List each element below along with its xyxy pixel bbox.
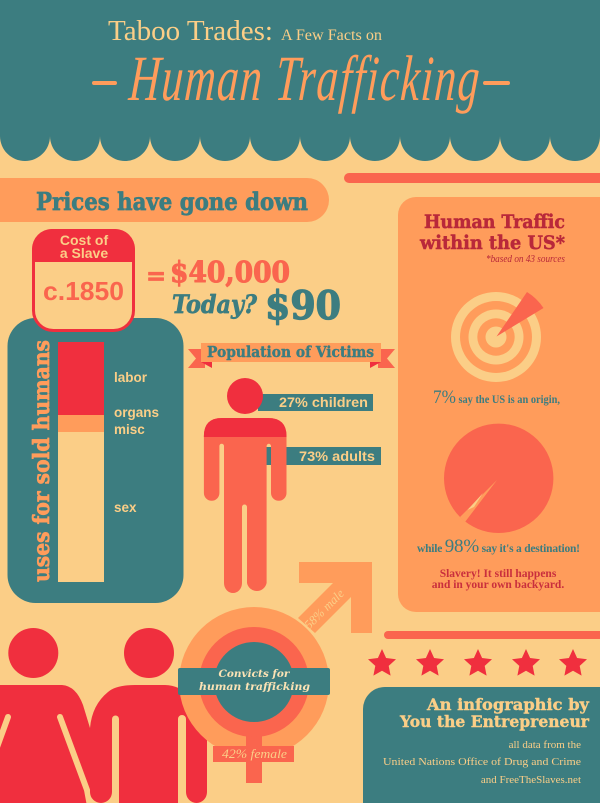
text: 7%: 7% say the US is an origin, bbox=[433, 387, 560, 408]
panel: credits: An infographic by bbox=[426, 695, 590, 714]
stars bbox=[368, 649, 587, 676]
bar labels bbox=[114, 370, 159, 515]
ribbon: population of victims: Population of Victims bbox=[207, 344, 374, 361]
lower rule bbox=[384, 631, 600, 639]
panel heading: Human Traffic bbox=[424, 211, 565, 233]
label: children: 27% children bbox=[279, 395, 368, 410]
panel heading: *based on 43 sources bbox=[486, 254, 565, 265]
icon: target 7% bbox=[451, 292, 544, 382]
title bbox=[92, 15, 510, 114]
price then: = bbox=[146, 261, 166, 290]
panel: credits: all data from the bbox=[509, 739, 581, 751]
price today: $90 bbox=[265, 283, 341, 329]
icon: male arrow bbox=[298, 562, 372, 633]
icon: female symbol bbox=[178, 607, 330, 783]
label: adults bbox=[266, 447, 381, 465]
header banner bbox=[0, 0, 600, 161]
panel: credits: You the Entrepreneur bbox=[399, 712, 590, 731]
ribbon: population of victims bbox=[188, 343, 395, 368]
title: A Few Facts on bbox=[281, 27, 382, 44]
bar labels: sex bbox=[114, 500, 137, 515]
heading: prices: Prices have gone down bbox=[36, 187, 308, 216]
icon: person bbox=[204, 378, 286, 593]
vertical heading: uses for sold humans bbox=[29, 340, 55, 582]
panel: credits: United Nations Office of Drug and Crime bbox=[383, 756, 581, 768]
bar labels: organs bbox=[114, 405, 159, 420]
card: cost of a slave bbox=[32, 229, 135, 330]
icon: man bbox=[90, 628, 207, 803]
label: children bbox=[258, 394, 373, 411]
price today bbox=[172, 283, 341, 329]
icon: female symbol: human trafficking bbox=[199, 681, 310, 693]
top rule bbox=[344, 173, 600, 183]
bar labels: labor bbox=[114, 370, 148, 385]
title: Taboo Trades: bbox=[108, 15, 273, 47]
icon: female symbol: Convicts for bbox=[219, 668, 291, 680]
panel: uses for sold humans bbox=[8, 318, 184, 603]
price then: $40,000 bbox=[170, 255, 290, 289]
stacked bar bbox=[58, 342, 104, 582]
card: cost of a slave: a Slave bbox=[60, 245, 108, 261]
panel: credits bbox=[363, 687, 600, 803]
heading: prices bbox=[0, 178, 329, 222]
card: cost of a slave: c.1850 bbox=[43, 276, 124, 306]
pie: 98% bbox=[444, 424, 553, 533]
panel: credits: and FreeTheSlaves.net bbox=[481, 774, 581, 786]
icon: woman bbox=[0, 628, 90, 803]
text: slavery note bbox=[432, 568, 564, 591]
bar labels: misc bbox=[114, 422, 145, 437]
text: slavery note: Slavery! It still happens bbox=[440, 568, 557, 580]
price today: Today? bbox=[172, 290, 257, 319]
icon: female symbol: 42% female bbox=[222, 746, 287, 761]
title: Human Trafficking bbox=[126, 42, 482, 114]
panel heading bbox=[419, 211, 565, 265]
card: cost of a slave: Cost of bbox=[60, 232, 108, 248]
text: slavery note: and in your own backyard. bbox=[432, 579, 564, 591]
panel: human traffic within the US bbox=[398, 197, 600, 612]
label: adults: 73% adults bbox=[299, 449, 375, 464]
panel heading: within the US* bbox=[419, 232, 565, 254]
text: 98%: while 98% say it's a destination! bbox=[417, 536, 580, 557]
icon: male arrow: 58% male bbox=[301, 586, 347, 632]
